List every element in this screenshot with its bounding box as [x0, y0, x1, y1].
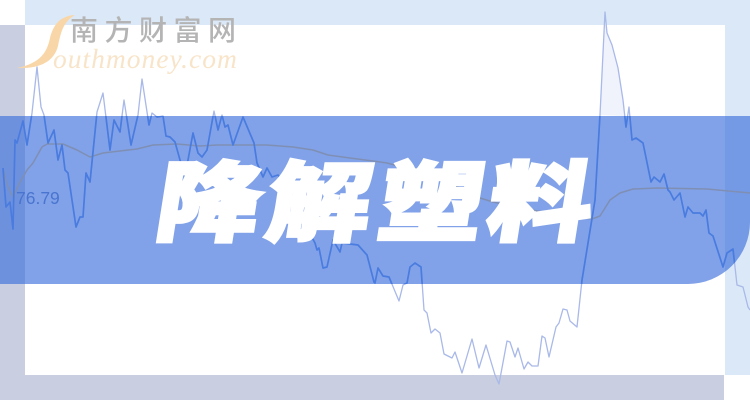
blue title band: [0, 116, 750, 284]
logo text: domain: outhmoney.com: [53, 43, 238, 74]
background frame: right bar: [725, 25, 750, 375]
title: 降解塑料: 降: [149, 132, 273, 259]
title: 降解塑料: [149, 132, 604, 259]
title: 降解塑料: 料: [480, 132, 604, 259]
price line: [2, 116, 736, 284]
background frame: left bar: [0, 25, 25, 400]
icon: orange swoosh S: [18, 15, 75, 68]
chart: strong lines inside band: [2, 116, 750, 284]
title: 降解塑料: 解: [259, 132, 383, 259]
logo: southmoney watermark: [18, 9, 243, 74]
title: 降解塑料: 塑: [371, 132, 495, 259]
background frame: bottom bar: [25, 375, 724, 400]
logo text: Chinese name: 南方财富网: [70, 9, 243, 49]
background frame: top bar: [25, 0, 750, 25]
moving average line: [3, 144, 750, 219]
chart label: value 76.79: 76.79: [16, 188, 60, 208]
